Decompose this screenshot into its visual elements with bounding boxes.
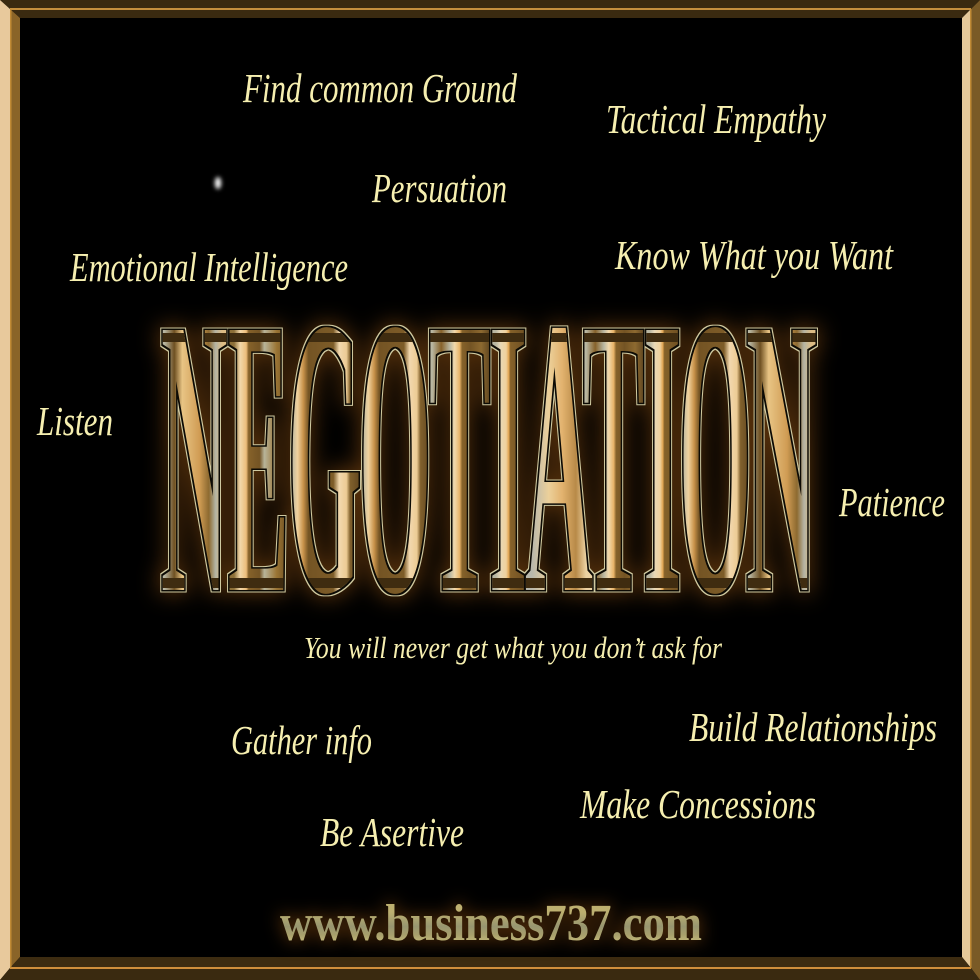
title: NEGOTIATION: I — [489, 236, 527, 676]
website url: www.business737.com — [280, 895, 702, 952]
title: NEGOTIATION: T — [429, 237, 490, 677]
title: NEGOTIATION: N — [746, 236, 817, 676]
keyword: Listen: Listen — [36, 398, 113, 444]
keyword: Persuation: Persuation — [371, 165, 507, 211]
keyword: Find common Ground: Find common Ground — [242, 65, 517, 111]
keyword: Emotional Intelligence: Emotional Intelligence — [69, 244, 348, 290]
keyword: Gather info: Gather info — [231, 717, 372, 763]
title: NEGOTIATION: T — [583, 237, 644, 677]
keyword: Patience: Patience — [838, 479, 945, 525]
title: NEGOTIATION: E — [228, 237, 289, 677]
title: NEGOTIATION: G — [288, 238, 361, 677]
title: NEGOTIATION: I — [643, 236, 681, 676]
keyword: Know What you Want: Know What you Want — [614, 232, 894, 278]
title: NEGOTIATION: N — [161, 237, 227, 677]
tagline: You will never get what you don’t ask for — [304, 630, 723, 665]
keyword: Make Concessions: Make Concessions — [579, 781, 816, 827]
keyword: Be Asertive: Be Asertive — [320, 809, 464, 855]
title: NEGOTIATION: O — [359, 238, 431, 677]
title: NEGOTIATION: O — [679, 238, 751, 677]
title: NEGOTIATION: A — [525, 238, 593, 677]
keyword: Tactical Empathy: Tactical Empathy — [606, 96, 827, 142]
title: NEGOTIATION — [161, 236, 817, 677]
sparkle — [215, 177, 221, 189]
